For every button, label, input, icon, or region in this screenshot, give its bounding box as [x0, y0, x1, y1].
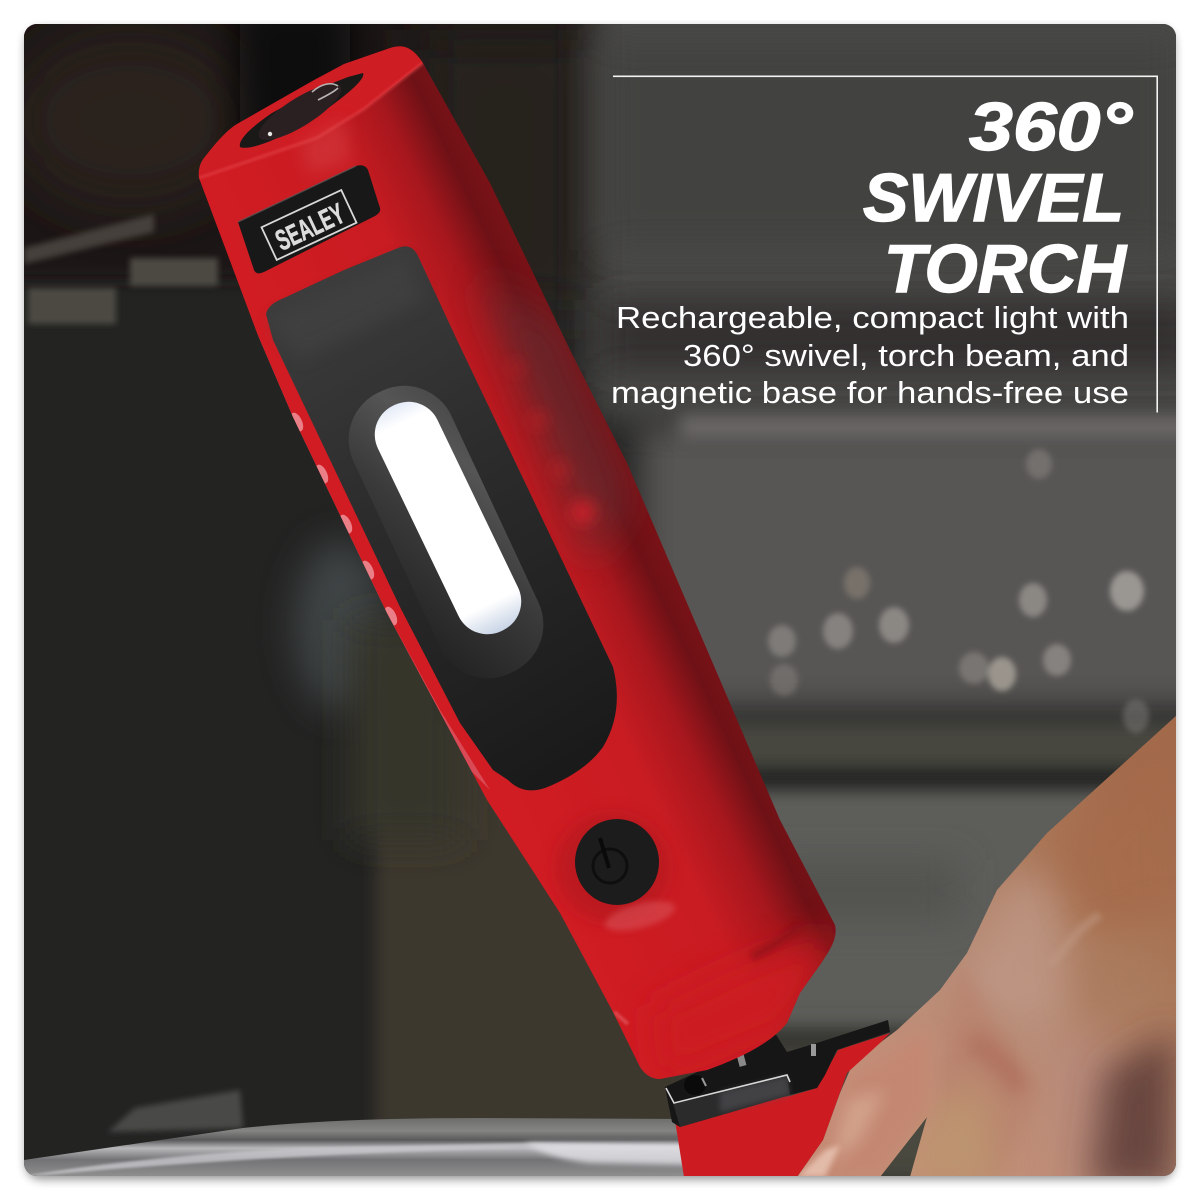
right-hand grey wall and tyres [590, 0, 1200, 420]
back of hand tones [978, 872, 1075, 1018]
thumb tones [810, 1106, 927, 1176]
pink left strip [257, 333, 490, 790]
rear crease [752, 925, 800, 957]
knuckle highlight [1061, 912, 1102, 952]
black hinge block [665, 1020, 890, 1127]
red torch body [190, 40, 850, 1090]
LED housing [348, 386, 544, 677]
title: TORCH [884, 231, 1128, 307]
description: 360° swivel, torch beam, and [683, 338, 1129, 373]
title: 360° [969, 89, 1133, 165]
hand [798, 716, 1176, 1176]
red torch base [665, 1020, 890, 1177]
translucent glow strip [480, 280, 630, 560]
title [863, 102, 1134, 294]
title: SWIVEL [863, 160, 1124, 236]
description: magnetic base for hands-free use [611, 375, 1129, 410]
SEALEY badge [238, 165, 380, 273]
torch head lens [240, 73, 363, 149]
description: Rechargeable, compact light with [616, 300, 1129, 335]
SEALEY badge: SEALEY [271, 198, 350, 257]
top rim [204, 46, 423, 158]
power button [556, 814, 678, 937]
bright lower body [650, 930, 835, 1085]
black control panel [266, 246, 617, 790]
grip bumps [288, 411, 400, 627]
callout frame lines [613, 76, 1158, 412]
finger tones [954, 988, 1016, 1119]
LED light [374, 402, 522, 634]
description [611, 300, 1129, 410]
bokeh highlights [768, 449, 1149, 733]
chrome pipe [24, 1118, 690, 1177]
